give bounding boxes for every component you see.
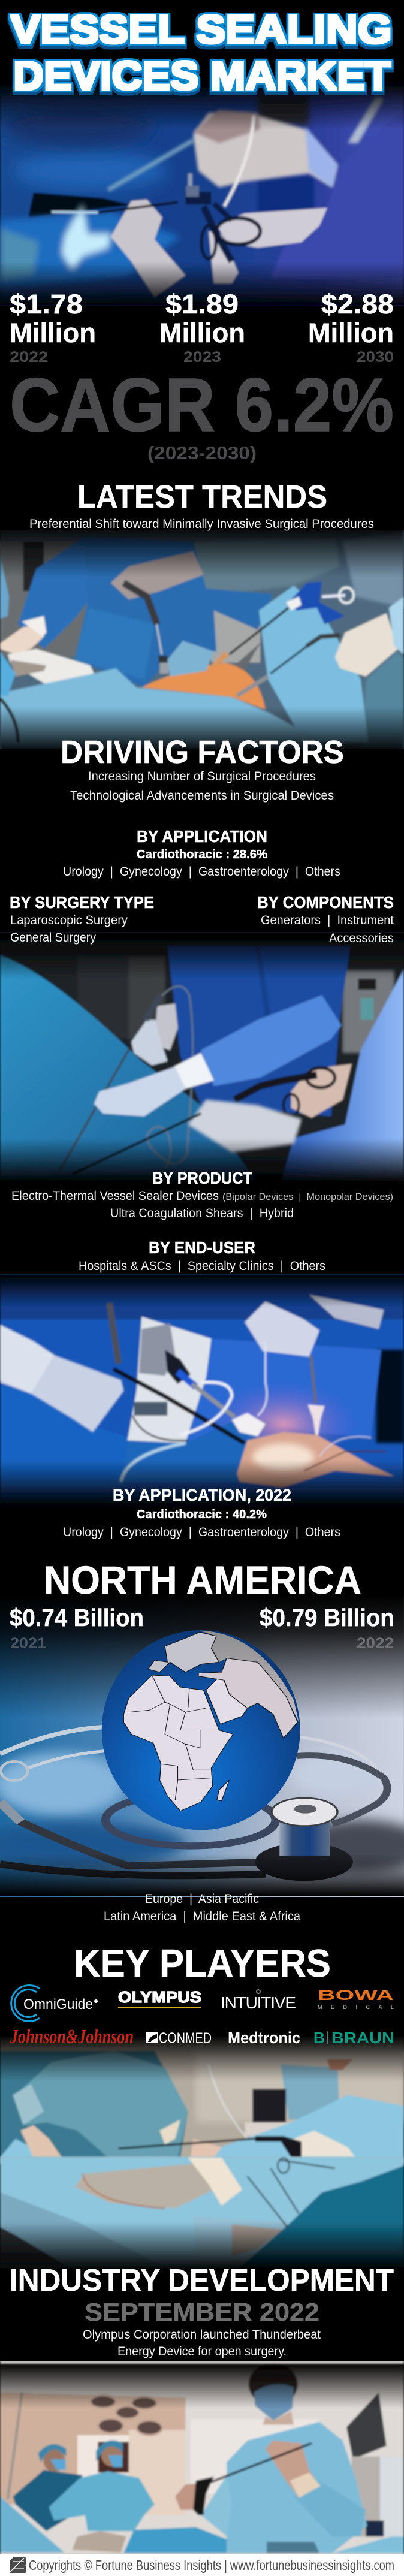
logo: B. Braun: BRAUN (331, 2029, 394, 2047)
segment: by components: BY COMPONENTS (257, 893, 394, 912)
stat: 2023 market value (159, 289, 245, 366)
logo: Medtronic: Medtronic (228, 2029, 300, 2047)
gown centre (167, 946, 351, 1116)
heading: industry development: INDUSTRY DEVELOPMENT (10, 2263, 394, 2298)
title: DEVICES MARKET (13, 53, 391, 98)
stat: North America 2021: 2021 (10, 1635, 46, 1652)
logo: Intuitive: INTUITIVE (221, 1993, 296, 2012)
abdomen (141, 663, 266, 710)
latest trends text: Preferential Shift toward Minimally Invasive Surgical Procedures (29, 517, 374, 531)
segment: by application 2022: Urology | Gynecology | Gastroenterology | Others (63, 1525, 340, 1539)
segment: by application: Cardiothoracic : 28.6% (137, 848, 267, 861)
stat: 2030 market value: $2.88 (321, 289, 394, 319)
date: September 2022: SEPTEMBER 2022 (85, 2298, 319, 2326)
central drape with trocar (167, 641, 214, 677)
scissors instrument (185, 198, 260, 261)
patient's leg under cover (75, 2163, 214, 2209)
heading: latest trends: LATEST TRENDS (77, 479, 327, 515)
blurred wand (108, 140, 193, 190)
metal shaft and port (311, 1355, 316, 1403)
stat: 2030 market value: Million (308, 318, 394, 348)
instrument held by surgeon (201, 2443, 312, 2486)
logo: Bowa Medical: MEDICAL (318, 2004, 394, 2010)
centre white gap (128, 1317, 211, 1443)
stat: 2023 market value: 2023 (183, 349, 221, 366)
logo: ConMed (146, 2030, 212, 2047)
drape folds (193, 2216, 304, 2264)
lower-left glove (111, 200, 185, 297)
logo: ConMed: CONMED (159, 2030, 212, 2047)
segment: by surgery type: General Surgery (10, 931, 96, 945)
surgeon's gloved hands (266, 2441, 319, 2498)
bandaged hand (188, 2158, 242, 2206)
glove (94, 1067, 185, 1116)
title (11, 7, 392, 98)
blurred front glove (188, 1100, 302, 1152)
upper blurred glove (193, 113, 337, 187)
heading: driving factors: DRIVING FACTORS (61, 734, 344, 770)
white port (232, 1413, 266, 1436)
development text: Olympus Corporation launched Thunderbeat (83, 2328, 321, 2342)
driving factors text: Technological Advancements in Surgical Devices (70, 789, 334, 803)
cable (147, 986, 193, 1169)
segment: by application: BY APPLICATION (137, 827, 267, 846)
white cuff (174, 1053, 214, 1089)
segment: by product: Ultra Coagulation Shears | Hybrid (110, 1206, 294, 1220)
scissors (234, 1075, 317, 1100)
surgical lights (90, 2396, 162, 2435)
segment: by components: Accessories (329, 931, 394, 945)
drapes (0, 2095, 404, 2158)
segment: by application 2022 (63, 1486, 340, 1539)
stat: North America 2022 (260, 1604, 394, 1652)
segment: by surgery type (10, 893, 154, 945)
right glove (216, 208, 327, 248)
right wall (191, 2419, 319, 2494)
stat: 2022 market value: $1.78 (10, 289, 83, 319)
stat: North America 2022: $0.79 Billion (260, 1604, 394, 1631)
other regions (104, 1892, 300, 1923)
instrument shaft (98, 203, 178, 213)
stat: 2023 market value: $1.89 (165, 289, 239, 319)
left lower gown (0, 1386, 129, 1487)
logo: B. Braun: B (313, 2029, 325, 2047)
dark upper background (258, 95, 309, 125)
logo: B. Braun (313, 2029, 394, 2047)
right pale blue drape (259, 586, 369, 743)
logo: Bowa Medical (318, 1987, 394, 2010)
stethoscope chest piece (255, 1798, 353, 1881)
glowing surgical field (0, 204, 180, 289)
teal drape (237, 2165, 404, 2270)
lower pale blue drape (0, 668, 335, 753)
driving factors text (70, 770, 334, 803)
segment: by end-user: Hospitals & ASCs | Specialty Clinics | Others (79, 1259, 325, 1273)
footer logo (10, 2557, 26, 2573)
segment: by product: (Bipolar Devices | Monopolar Devices) (222, 1191, 393, 1202)
segment: by components (257, 893, 394, 945)
driving factors text: Increasing Number of Surgical Procedures (88, 770, 316, 783)
stat: 2022 market value: Million (10, 318, 96, 348)
left team gowns (0, 2051, 188, 2158)
segment: by application 2022: BY APPLICATION, 2022 (113, 1486, 291, 1504)
segment: by application 2022: Cardiothoracic : 40.2% (137, 1508, 267, 1521)
photo: surgeons over blue drape (0, 929, 404, 1183)
photo: operating theatre team (0, 2034, 404, 2270)
IV pole (8, 2393, 22, 2499)
right glove (335, 613, 398, 677)
logo: Olympus: OLYMPUS (118, 1988, 201, 2006)
other regions: Europe | Asia Pacific (145, 1892, 259, 1906)
right gown (185, 1338, 381, 1443)
photo: surgeon holding laparoscopic instrument (0, 2360, 404, 2555)
globe (102, 1630, 300, 1830)
photo: laparoscopic surgery on abdomen (0, 525, 404, 753)
other regions: Latin America | Middle East & Africa (104, 1910, 300, 1923)
stat: North America 2021 (10, 1604, 144, 1652)
handpiece and glove (155, 1003, 178, 1050)
segment: by end-user: BY END-USER (149, 1238, 255, 1257)
right blue sleeve (281, 969, 404, 1183)
blue endoscope handle (165, 1350, 191, 1384)
blue gown (73, 537, 273, 687)
centre glove (139, 1323, 175, 1376)
development text (83, 2328, 321, 2358)
right pale gown (343, 530, 404, 608)
photo: surgeon hands with laparoscopic scissors (0, 83, 404, 308)
segment: by product: Electro-Thermal Vessel Sealer Devices (11, 1189, 219, 1203)
blue grasper (291, 581, 345, 624)
instruments (248, 2158, 335, 2227)
lower trocar (269, 645, 308, 675)
left sleeve on edge (0, 556, 9, 619)
CAGR period: (2023-2030) (147, 442, 257, 463)
photo: endoscopic procedure in blue (0, 1264, 404, 1507)
left hand and cuff (0, 624, 44, 654)
peach walls (0, 2393, 185, 2505)
stat: 2022 market value: 2022 (10, 349, 48, 366)
dark wedge (28, 192, 131, 218)
camera and black cable (110, 1303, 119, 1364)
lower blue (119, 1416, 258, 1482)
backdrop (0, 1594, 404, 1906)
white tube (224, 116, 254, 206)
black generator box (252, 2089, 286, 2123)
left white sleeve and glove (0, 1325, 123, 1432)
stat: North America 2022: 2022 (357, 1635, 394, 1652)
logo: OmniGuide: OmniGuide (23, 1996, 93, 2013)
equipment right (346, 2393, 387, 2459)
main surgeon (227, 2422, 367, 2553)
logo: OmniGuide (11, 1985, 98, 2022)
segment: by end-user (79, 1238, 325, 1273)
upper instrument (123, 583, 157, 624)
heading: north america: NORTH AMERICA (44, 1558, 361, 1602)
right team member (281, 2065, 340, 2120)
footer bar (0, 2554, 404, 2576)
photo: globe on stethoscope (0, 1594, 404, 1906)
logo: Johnson & Johnson: Johnson&Johnson (10, 2026, 134, 2048)
stat: 2022 market value (10, 289, 96, 366)
purple-blue sleeve (270, 110, 404, 278)
instrument (119, 2138, 270, 2149)
segment: by surgery type: BY SURGERY TYPE (10, 893, 154, 912)
logo: Bowa Medical: BOWA (318, 1987, 394, 2004)
segment: by surgery type: Laparoscopic Surgery (10, 913, 128, 927)
continents (123, 1631, 299, 1811)
background surgeons (13, 2470, 83, 2531)
white drape (8, 649, 97, 684)
segment: by product (11, 1169, 393, 1220)
surgeon heads (40, 2442, 123, 2472)
title: VESSEL SEALING (11, 7, 392, 52)
abdomen (237, 1432, 394, 1487)
segment: by components: Generators | Instrument (261, 913, 394, 927)
teal drape (0, 955, 258, 1183)
fingers (209, 231, 239, 283)
top-right gloves (245, 1301, 319, 1356)
segment: by application: Urology | Gynecology | Gastroenterology | Others (63, 865, 340, 879)
table drapes (0, 2496, 64, 2553)
sleeve (201, 995, 341, 1086)
heading: key players: KEY PLAYERS (74, 1941, 331, 1985)
hands (20, 2125, 62, 2158)
stat: North America 2021: $0.74 Billion (10, 1604, 144, 1631)
segment: by product: BY PRODUCT (152, 1169, 252, 1187)
stat: 2030 market value (308, 289, 394, 366)
upper pale gown (193, 539, 340, 597)
stat: 2023 market value: Million (159, 318, 245, 348)
stethoscope tubing (0, 1727, 387, 1875)
top glove (111, 551, 204, 599)
stat: 2030 market value: 2030 (357, 349, 394, 366)
segment: by application (63, 827, 340, 879)
development text: Energy Device for open surgery. (117, 2345, 287, 2358)
scissors hand (291, 1064, 352, 1118)
